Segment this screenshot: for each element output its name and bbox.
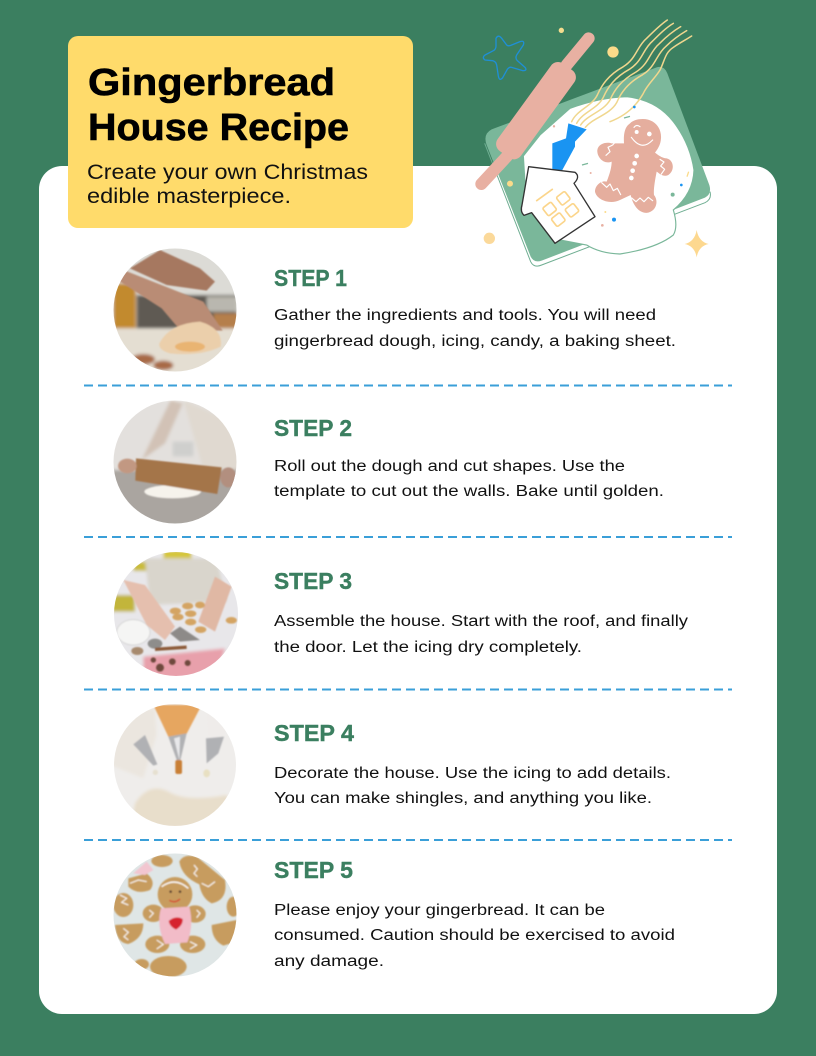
step 4 text: Decorate the house. Use the icing to add details. [274, 765, 671, 782]
title: Gingerbread [88, 62, 335, 104]
gingerbread man [595, 119, 673, 213]
step 3 text: STEP 3 [274, 568, 352, 594]
board [485, 67, 710, 266]
icing swirls [572, 20, 692, 127]
white content panel [39, 166, 777, 1014]
title card [68, 36, 413, 228]
step 5 text: any damage. [274, 953, 384, 970]
step 1 text [274, 265, 676, 350]
step 5 text [274, 857, 675, 970]
icon: blue star [483, 36, 526, 79]
sprinkles and decorations [484, 28, 689, 244]
step 3 text [274, 568, 688, 656]
step 3 text: the door. Let the icing dry completely. [274, 639, 582, 656]
step 3 photo: cutting cookies [114, 552, 238, 676]
illustration: gingerbread baking scene [481, 20, 710, 266]
step 2 text [274, 415, 664, 500]
step 2 text: Roll out the dough and cut shapes. Use the [274, 458, 625, 475]
step 1 text: gingerbread dough, icing, candy, a baking sheet. [274, 333, 676, 350]
step 2 text: STEP 2 [274, 415, 352, 441]
title: House Recipe [88, 107, 349, 149]
step 1 photo: hands kneading dough [114, 248, 236, 372]
step 4 text: STEP 4 [274, 720, 354, 746]
step 5 text: Please enjoy your gingerbread. It can be [274, 902, 605, 919]
subtitle [87, 161, 368, 208]
step 5 photo: decorated gingerbread cookies [114, 854, 236, 976]
house cookie [521, 167, 595, 243]
step 1 text: STEP 1 [274, 265, 347, 291]
step 5 text: consumed. Caution should be exercised to avoid [274, 927, 675, 944]
step 1 text: Gather the ingredients and tools. You will need [274, 307, 656, 324]
dough [523, 97, 694, 254]
step 4 photo: piping tips [114, 704, 236, 826]
title [88, 62, 349, 149]
step 2 text: template to cut out the walls. Bake until golden. [274, 483, 664, 500]
piping bag [552, 123, 587, 188]
step 4 text: You can make shingles, and anything you like. [274, 790, 652, 807]
rolling pin [481, 38, 589, 184]
step 2 photo: rolling dough [114, 400, 236, 524]
step 5 text: STEP 5 [274, 857, 353, 883]
subtitle: Create your own Christmas [87, 161, 368, 184]
step 4 text [274, 720, 671, 807]
icon: sparkle [685, 230, 709, 257]
subtitle: edible masterpiece. [87, 185, 291, 208]
step 3 text: Assemble the house. Start with the roof, and finally [274, 613, 688, 630]
